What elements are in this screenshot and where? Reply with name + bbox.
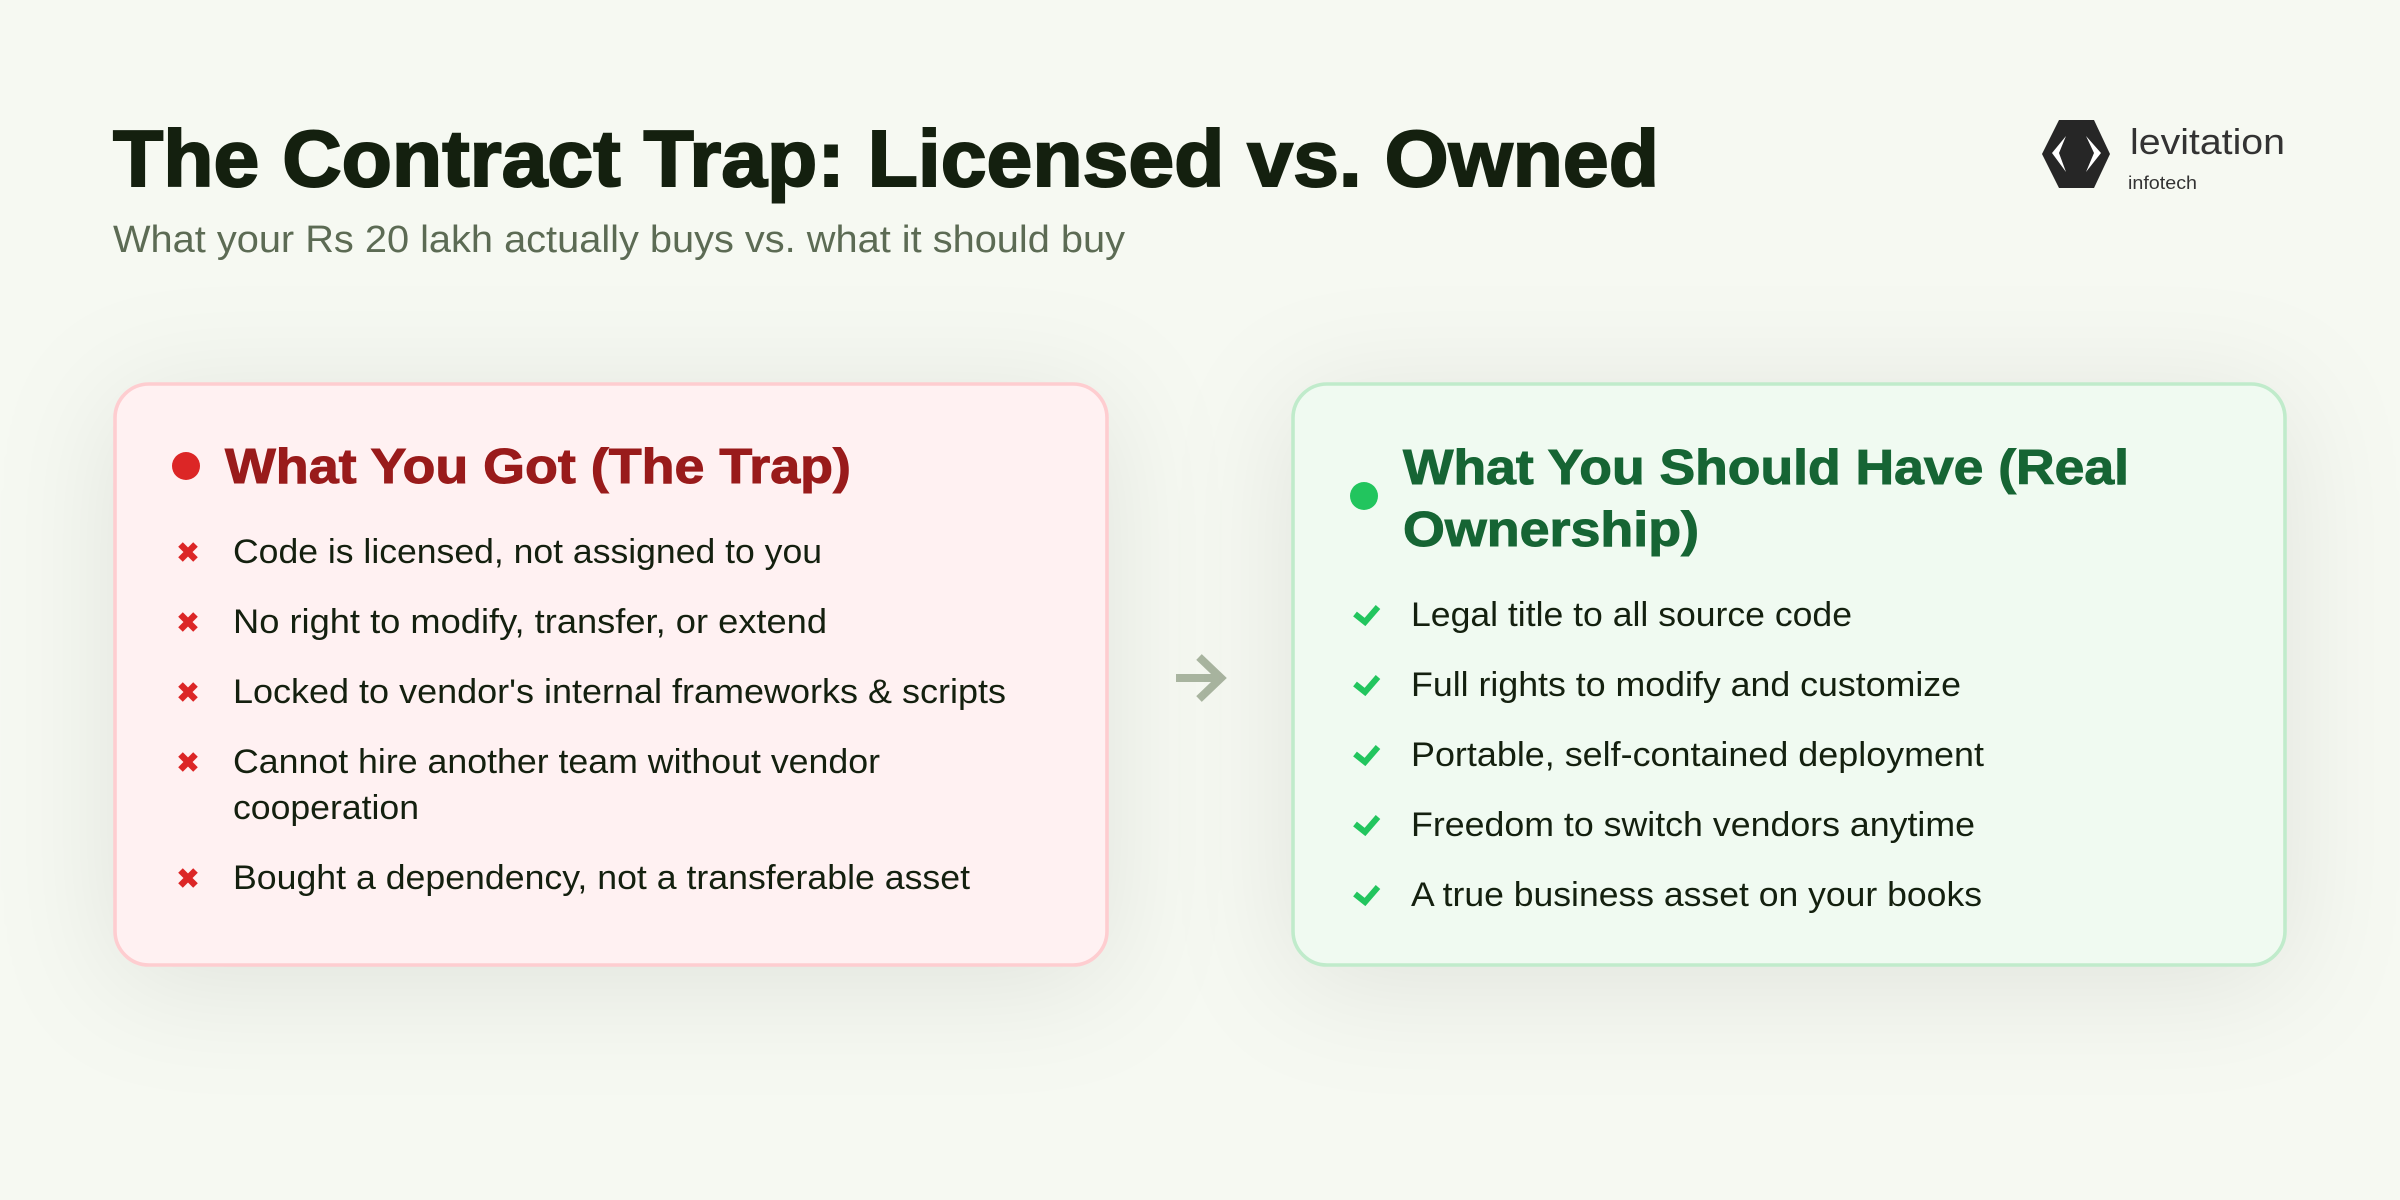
- item: locked to vendor: Locked to vendor's internal frameworks & scripts: [233, 673, 1006, 711]
- item: cannot hire another team: [180, 743, 880, 827]
- item: full rights: Full rights to modify and customize: [1411, 666, 1961, 704]
- icon: hexagon with code chevrons: [2042, 120, 2110, 188]
- logo wordmark: levitation: [2130, 121, 2285, 162]
- item: portable deployment: Portable, self-contained deployment: [1411, 736, 1985, 774]
- heading: real ownership: Ownership): [1403, 503, 1699, 557]
- heading: real ownership: What You Should Have (Real: [1403, 441, 2129, 495]
- heading: real ownership: [1403, 441, 2129, 557]
- subtitle: What your Rs 20 lakh actually buys vs. what it should buy: [113, 219, 1125, 261]
- red status dot: [172, 452, 200, 480]
- panel background: [115, 384, 1107, 965]
- title: The Contract Trap: Licensed vs. Owned: [113, 114, 1659, 203]
- item: legal title: Legal title to all source code: [1411, 596, 1852, 634]
- item: true business asset: A true business asset on your books: [1411, 876, 1982, 914]
- green status dot: [1350, 482, 1378, 510]
- logo: levitation infotech: [2042, 120, 2285, 193]
- item: bought a dependency: Bought a dependency, not a transferable asset: [233, 859, 971, 897]
- logo tagline: infotech: [2128, 173, 2197, 193]
- item: cannot hire another team: cooperation: [233, 789, 419, 827]
- panel background: [1293, 384, 2285, 965]
- item: code is licensed: Code is licensed, not assigned to you: [233, 533, 822, 571]
- item: cannot hire another team: Cannot hire another team without vendor: [233, 743, 880, 781]
- item: freedom to switch: Freedom to switch vendors anytime: [1411, 806, 1975, 844]
- heading: the trap: What You Got (The Trap): [225, 440, 851, 494]
- item: no right to modify: No right to modify, transfer, or extend: [233, 603, 827, 641]
- arrow: from trap to ownership: [1176, 657, 1222, 699]
- panel: what you got (the trap): [115, 384, 1107, 965]
- panel: what you should have (real ownership): [1293, 384, 2285, 965]
